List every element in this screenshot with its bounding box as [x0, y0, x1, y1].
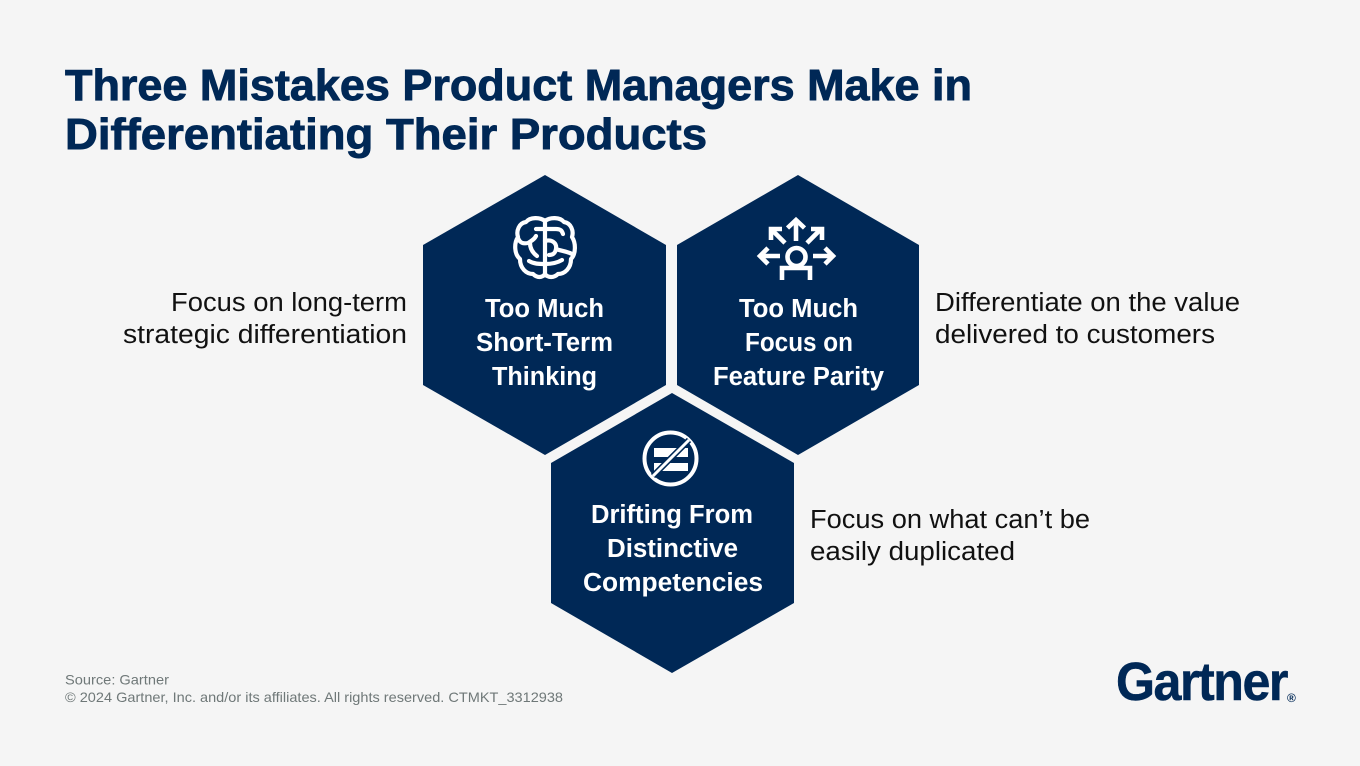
text block: long-term advice: Focus on long-term [171, 289, 407, 317]
label: drifting from distinctive competencies: Drifting From [591, 501, 753, 529]
label: drifting from distinctive competencies [583, 501, 763, 597]
icon: not-equal in circle [644, 432, 696, 484]
source and copyright: © 2024 Gartner, Inc. and/or its affiliates. All rights reserved. CTMKT_3312938 [65, 689, 563, 705]
text block: value advice [935, 289, 1240, 349]
panel: too much short-term thinking [423, 175, 666, 455]
text block: long-term advice [123, 289, 407, 349]
logo: Gartner: ® [1287, 691, 1296, 705]
label: too much focus on feature parity: Feature Parity [713, 363, 885, 391]
text block: value advice: Differentiate on the value [935, 289, 1240, 317]
panel: too much focus on feature parity [677, 175, 919, 455]
label: too much focus on feature parity [713, 295, 885, 391]
label: drifting from distinctive competencies: Competencies [583, 569, 763, 597]
label: too much short-term thinking: Short-Term [476, 329, 613, 357]
label: too much short-term thinking [476, 295, 613, 391]
icon: arrows radiating from person [760, 220, 833, 280]
label: too much focus on feature parity: Too Much [739, 295, 858, 323]
title: Three Mistakes Product Managers Make in [65, 61, 972, 110]
text block: duplication advice [810, 506, 1090, 566]
source and copyright: Source: Gartner [65, 672, 169, 688]
text block: long-term advice: strategic differentiation [123, 321, 407, 349]
icon: brain [515, 218, 575, 277]
label: too much focus on feature parity: Focus on [745, 329, 853, 357]
source and copyright [65, 672, 563, 705]
logo: Gartner: Gartner [1116, 652, 1288, 712]
title: Differentiating Their Products [65, 110, 707, 159]
text block: value advice: delivered to customers [935, 321, 1215, 349]
text block: duplication advice: easily duplicated [810, 538, 1015, 566]
title [65, 61, 972, 159]
label: too much short-term thinking: Thinking [492, 363, 597, 391]
text block: duplication advice: Focus on what can’t be [810, 506, 1090, 534]
label: too much short-term thinking: Too Much [485, 295, 604, 323]
label: drifting from distinctive competencies: Distinctive [607, 535, 738, 563]
panel: drifting from distinctive competencies [551, 393, 794, 673]
